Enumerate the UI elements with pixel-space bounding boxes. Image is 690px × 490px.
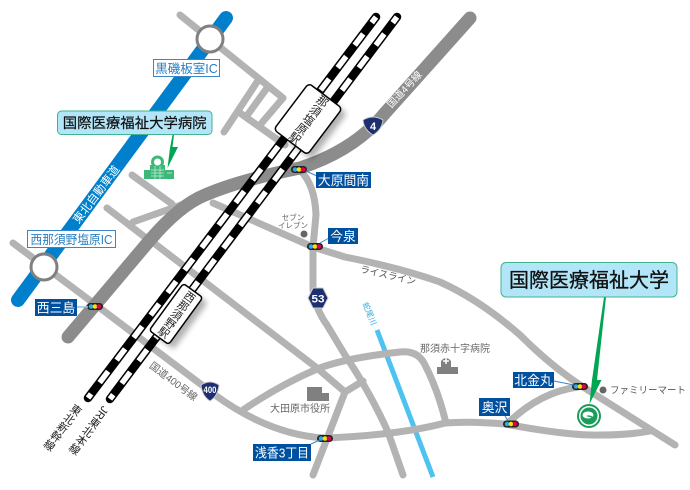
hospital label <box>58 111 212 134</box>
landmark: FamilyMart: ファミリーマート <box>610 386 686 396</box>
university label <box>501 262 677 297</box>
interchange: Kuroiso Itamuro <box>197 26 223 52</box>
icon: university logo <box>577 404 601 428</box>
intersection label: Okuzawa <box>479 398 510 421</box>
traffic signal: Kitakanamaru <box>572 383 588 390</box>
route shield 53: 53 <box>312 294 324 306</box>
station: Nishinasuno <box>149 283 208 350</box>
hospital label: 国際医療福祉大学病院 <box>63 115 207 132</box>
landmark: Seven-Eleven: セブン <box>282 212 304 222</box>
intersection label: Oharamami <box>306 171 371 188</box>
expressway <box>18 18 226 300</box>
landmark: Nasu Red Cross Hospital <box>420 342 490 374</box>
route shield 4 <box>363 117 383 135</box>
landmark: Ohtawara city hall <box>270 387 330 415</box>
traffic signal: Asaka 3-chome <box>317 435 333 442</box>
route name: national route 4: 国道4号線 <box>384 68 425 111</box>
station: Nasushiobara: 那須塩原駅 <box>286 92 331 147</box>
university label: 国際医療福祉大学 <box>509 269 669 292</box>
intersection label: Nishimishima: 西三島 <box>37 300 75 316</box>
station: Nasushiobara <box>274 83 347 160</box>
callout pointer: hospital <box>168 135 178 168</box>
river <box>361 301 433 477</box>
landmark: Seven-Eleven: イレブン <box>278 220 308 230</box>
intersection label: Kitakanamaru: 北金丸 <box>514 373 553 388</box>
label: Kuroiso Itamuro IC: 黒磯板室IC <box>155 62 218 76</box>
rail label: Tohoku Shinkansen: 東北新幹線 <box>41 401 84 453</box>
station: Nishinasuno: 西那須野駅 <box>155 288 197 341</box>
route shield 4: 4 <box>370 121 377 133</box>
route shield 53 <box>308 288 328 308</box>
intersection label: Asaka 3-chome: 浅香3丁目 <box>255 446 309 460</box>
label: Nishinasuno Shiobara IC: 西那須野塩原IC <box>30 232 112 247</box>
intersection label: Okuzawa: 奥沢 <box>482 400 508 415</box>
intersection label: Imaizumi <box>320 228 358 244</box>
traffic signal: Imaizumi <box>307 243 323 250</box>
railway: JR Tohoku main line <box>88 17 376 398</box>
river name: 蛇尾川 <box>361 301 379 327</box>
railway: Tohoku Shinkansen <box>110 17 397 399</box>
rail label: JR Tohoku main line: JR東北本線 <box>66 403 110 457</box>
landmark: Ohtawara city hall: 大田原市役所 <box>270 402 330 415</box>
intersection label: Oharamami: 大原間南 <box>318 173 369 188</box>
expressway name: 東北自動車道 <box>70 162 123 226</box>
intersection label: Nishimishima <box>35 299 88 316</box>
intersection label: Kitakanamaru <box>513 372 574 388</box>
icon: hospital building <box>144 156 174 179</box>
route shield 400: 400 <box>204 385 216 395</box>
road name: Rice Line: ライスライン <box>359 264 417 288</box>
traffic signal: Okuzawa <box>503 420 519 428</box>
interchange: Nishinasuno Shiobara <box>31 254 57 280</box>
landmark: Nasu Red Cross Hospital: 那須赤十字病院 <box>420 342 490 355</box>
landmark: Seven-Eleven <box>278 212 308 238</box>
national route 4 road <box>68 18 470 337</box>
intersection label: Asaka 3-chome <box>253 440 320 461</box>
route name: national route 400: 国道400号線 <box>147 359 200 404</box>
intersection label: Imaizumi: 今泉 <box>330 229 356 244</box>
traffic signal: Oharamami <box>291 166 307 173</box>
route shield 400 <box>201 382 219 401</box>
callout pointer: university <box>590 297 606 404</box>
traffic signal: Nishimishima <box>87 303 103 310</box>
